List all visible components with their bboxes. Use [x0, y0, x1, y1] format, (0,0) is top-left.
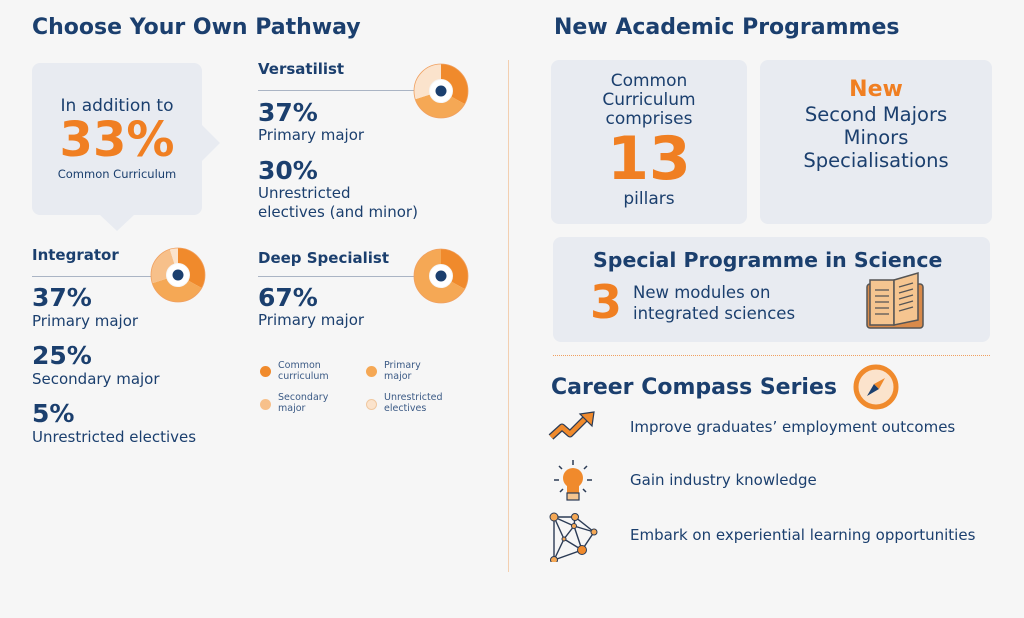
item: employment outcomes: Improve graduates’ employment outcomes [630, 418, 955, 436]
block: versatilist: Unrestricted [258, 184, 350, 202]
item: industry knowledge: Gain industry knowledge [630, 471, 817, 489]
item: experiential learning [550, 512, 975, 562]
chart: deep specialist donut [414, 248, 468, 304]
block: integrator: Unrestricted electives [32, 428, 196, 446]
block: versatilist: 30% [258, 156, 318, 185]
legend: Secondary [278, 392, 328, 403]
callout: 33% common curriculum: In addition to [61, 96, 173, 116]
icon: trend arrow [548, 411, 595, 440]
panel: common curriculum 13 pillars: Common [611, 71, 687, 91]
block: integrator: Secondary major [32, 370, 160, 388]
panel: new second majors: Specialisations [803, 149, 949, 172]
title: choose your own pathway: Choose Your Own Pathway [32, 15, 361, 40]
block: versatilist: Primary major [258, 126, 364, 144]
legend: major [384, 371, 411, 382]
legend: electives [384, 403, 426, 414]
legend: Common [278, 360, 321, 371]
block: versatilist [258, 60, 468, 221]
icon: open book [866, 272, 924, 329]
title: new academic programmes: New Academic Programmes [554, 15, 899, 40]
block: deep specialist: 67% [258, 283, 318, 312]
legend: Unrestricted [384, 392, 443, 403]
legend: Primary [384, 360, 421, 371]
callout: 33% common curriculum [32, 63, 220, 230]
block: versatilist: Versatilist [258, 60, 344, 78]
panel: new second majors: Minors [844, 126, 908, 149]
block: integrator: Primary major [32, 312, 138, 330]
callout: 33% common curriculum: Common Curriculum [58, 167, 176, 181]
panel: common curriculum 13 pillars [551, 60, 747, 224]
panel: special programme in science: New modules on [633, 283, 770, 302]
block: integrator: 5% [32, 399, 74, 428]
block: deep specialist: Primary major [258, 311, 364, 329]
block: versatilist: 37% [258, 98, 318, 127]
block: versatilist: electives (and minor) [258, 203, 418, 221]
panel: new second majors: New [849, 77, 903, 102]
callout: 33% common curriculum: 33% [60, 112, 174, 168]
block: integrator: 37% [32, 283, 92, 312]
panel: special programme in science [553, 237, 990, 342]
item: experiential learning: Embark on experiential learning opportunities [630, 526, 975, 544]
block: integrator [32, 246, 206, 446]
panel: common curriculum 13 pillars: comprises [606, 109, 692, 129]
panel: new second majors: Second Majors [805, 103, 947, 126]
panel: special programme in science: 3 [590, 275, 622, 329]
chart: integrator donut [150, 248, 206, 302]
block: deep specialist [258, 248, 468, 329]
block: integrator: Integrator [32, 246, 119, 264]
heading: career compass series: Career Compass Series [551, 375, 837, 400]
legend [260, 360, 443, 414]
panel: common curriculum 13 pillars: 13 [607, 124, 691, 194]
panel: common curriculum 13 pillars: Curriculum [602, 90, 696, 110]
block: deep specialist: Deep Specialist [258, 249, 389, 267]
icon: light bulb [554, 460, 592, 501]
panel: special programme in science: Special Programme in Science [593, 248, 942, 272]
chart: versatilist donut [414, 64, 468, 118]
icon: compass [854, 364, 898, 410]
legend: curriculum [278, 371, 329, 382]
panel: common curriculum 13 pillars: pillars [623, 189, 675, 209]
panel: special programme in science: integrated sciences [633, 304, 795, 323]
block: integrator: 25% [32, 341, 92, 370]
icon: network [550, 512, 598, 562]
panel: new second majors [760, 60, 992, 224]
item: industry knowledge [554, 460, 817, 501]
item: employment outcomes [548, 411, 955, 440]
legend: major [278, 403, 305, 414]
